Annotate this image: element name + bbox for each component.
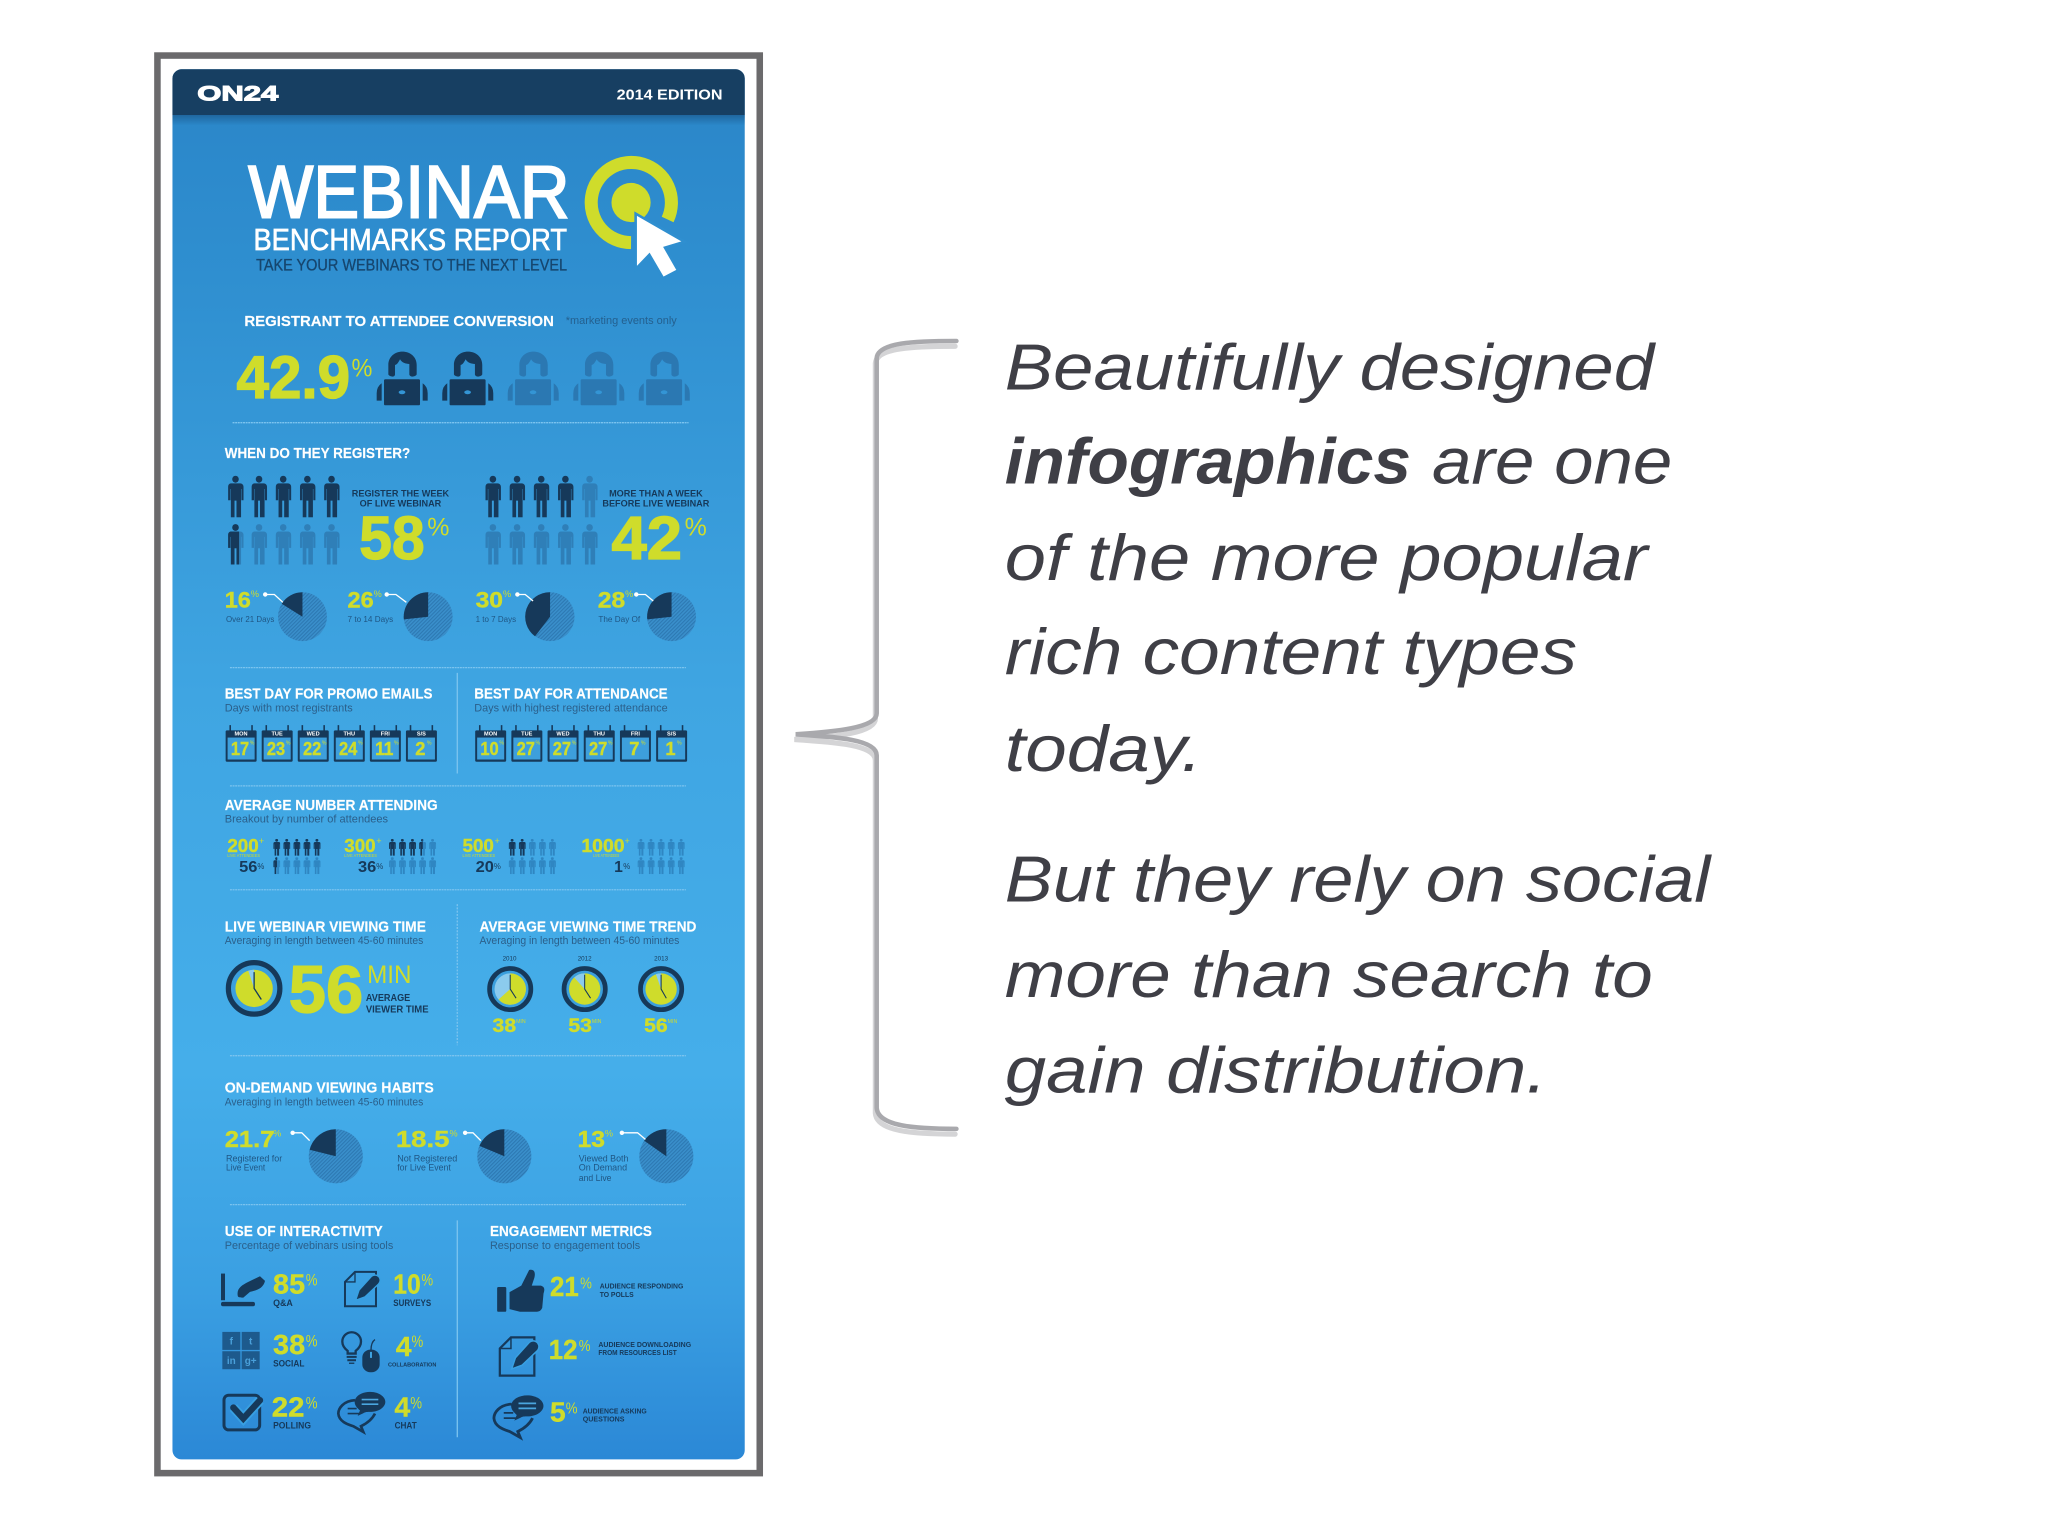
subheading: Averaging in length between 45-60 minutes xyxy=(479,935,680,947)
group: 1000+ attendees xyxy=(581,835,685,876)
stat: Q&A 85%: Q&A xyxy=(273,1298,293,1308)
pie: 7 to 14 days 26%: % xyxy=(374,589,382,599)
pie: not registered 18.5%: Not Registered xyxy=(397,1154,457,1164)
heading: BEST DAY FOR ATTENDANCE xyxy=(474,685,668,702)
group: 500+ attendees xyxy=(463,835,556,876)
calendar row: % xyxy=(358,741,363,747)
clock 2013 56 min: 56 xyxy=(644,1016,668,1037)
icon: document with pen xyxy=(500,1337,539,1376)
stat 42%: 42 xyxy=(611,504,682,573)
calendar row: 22 xyxy=(303,738,321,759)
paragraph 1: are one xyxy=(1432,424,1672,497)
calendar row: 2 xyxy=(415,738,425,759)
pie: 7 to 14 days 26%: 26 xyxy=(348,588,374,613)
stat: social 38%: SOCIAL xyxy=(273,1359,305,1369)
stat: social 38%: 38 xyxy=(273,1329,305,1360)
calendar row: % xyxy=(427,741,432,747)
paragraph 1: rich content types xyxy=(1005,615,1577,688)
pie: viewed both 13%: % xyxy=(605,1129,613,1139)
calendar row: TUE xyxy=(271,732,283,738)
pie: over 21 days 16% xyxy=(225,588,327,641)
section: registrant to attendee conversion xyxy=(236,313,690,411)
clock 2012 53 min: 2012 xyxy=(578,955,592,962)
stat: chat 4% xyxy=(338,1391,422,1432)
calendar row xyxy=(475,725,687,762)
group: 200+ attendees: % xyxy=(257,862,264,871)
caption 58% xyxy=(352,489,450,508)
calendar row: % xyxy=(322,741,327,747)
icon: large clock xyxy=(228,963,280,1014)
icon: social tiles: f xyxy=(230,1337,234,1348)
calendar row: 10 xyxy=(480,738,499,759)
calendar row: WED xyxy=(307,732,320,738)
calendar row xyxy=(226,725,437,762)
subheading: Breakout by number of attendees xyxy=(225,813,389,825)
pie: viewed both 13%: Viewed Both xyxy=(579,1154,628,1164)
group: 1000+ attendees: % xyxy=(623,862,630,871)
calendar row: % xyxy=(250,741,255,747)
group: 1000+ attendees: 1000 xyxy=(581,835,625,856)
pie: 1 to 7 days 30%: 30 xyxy=(476,588,503,613)
clock 2012 53 min: 53 xyxy=(568,1016,592,1037)
section: average viewing time trend xyxy=(479,919,697,1037)
stat 42%: % xyxy=(685,515,707,542)
calendar row: 23 xyxy=(267,738,285,759)
clock 2013 56 min xyxy=(640,955,682,1037)
icon: thumbs up xyxy=(497,1270,544,1312)
stat: surveys 10% xyxy=(345,1268,433,1308)
section: engagement metrics xyxy=(490,1223,692,1438)
stat: surveys 10%: SURVEYS xyxy=(393,1298,431,1308)
stat: downloading from resources 12%: % xyxy=(579,1338,591,1355)
heading: ON-DEMAND VIEWING HABITS xyxy=(225,1079,434,1096)
icon: social tiles: in xyxy=(227,1356,236,1367)
pie: viewed both 13% xyxy=(577,1126,693,1183)
calendar row: 24 xyxy=(339,738,358,759)
calendar row: 27 xyxy=(589,738,607,759)
pie: 7 to 14 days 26%: 7 to 14 Days xyxy=(348,615,393,624)
pie: 1 to 7 days 30% xyxy=(476,588,574,641)
calendar row: 11 xyxy=(375,738,393,759)
pie: the day of 28%: % xyxy=(625,589,633,599)
pie: the day of 28% xyxy=(598,588,696,641)
pie: 1 to 7 days 30%: % xyxy=(503,589,511,599)
icon: chat bubbles xyxy=(338,1392,385,1432)
paragraph 1: Beautifully designed xyxy=(1005,330,1657,403)
section: best day for promo emails xyxy=(225,685,437,762)
group: 500+ attendees: 20 xyxy=(476,859,494,876)
calendar row: 1 xyxy=(665,738,676,759)
stat 58%: % xyxy=(427,515,449,542)
calendar row: TUE xyxy=(521,732,533,738)
section: when do they register xyxy=(225,445,710,641)
people grid 42% xyxy=(486,476,598,564)
infographic frame xyxy=(157,56,760,1473)
group: 1000+ attendees: 1 xyxy=(614,859,623,876)
pie: 7 to 14 days 26% xyxy=(348,588,453,641)
pie: the day of 28%: 28 xyxy=(598,588,625,613)
subheading: Averaging in length between 45-60 minutes xyxy=(225,935,424,947)
calendar row: 27 xyxy=(517,738,535,759)
stat 56: 56 xyxy=(289,954,363,1028)
stat: polling 22%: % xyxy=(306,1393,317,1412)
stat: responding to polls 21%: AUDIENCE RESPONDING xyxy=(600,1282,684,1290)
caption 42%: MORE THAN A WEEK xyxy=(609,489,703,499)
caption 58%: REGISTER THE WEEK xyxy=(352,489,450,499)
heading: ENGAGEMENT METRICS xyxy=(490,1223,652,1240)
stat: collaboration 4%: % xyxy=(412,1332,423,1351)
stat: asking questions 5%: QUESTIONS xyxy=(583,1416,625,1424)
calendar row: % xyxy=(572,741,577,747)
group: 300+ attendees xyxy=(344,838,436,874)
calendar row: % xyxy=(394,741,399,747)
caption 42% xyxy=(602,489,710,508)
stat: asking questions 5%: 5 xyxy=(550,1397,566,1428)
calendar row: 7 xyxy=(629,738,639,759)
section: use of interactivity xyxy=(221,1223,436,1432)
group: 500+ attendees: 500 xyxy=(463,835,494,856)
calendar row: % xyxy=(536,741,541,747)
group: 200+ attendees: 200 xyxy=(227,835,259,856)
icon: target with cursor xyxy=(591,162,685,278)
pie: 1 to 7 days 30%: 1 to 7 Days xyxy=(476,615,516,624)
heading: LIVE WEBINAR VIEWING TIME xyxy=(225,919,426,936)
group: 1000+ attendees: LIVE ATTENDEES xyxy=(593,853,619,858)
group: 500+ attendees: % xyxy=(494,862,501,871)
stat 42.9%: 42.9 xyxy=(236,344,350,411)
text block: commentary xyxy=(1005,330,1712,1106)
stat: chat 4%: CHAT xyxy=(395,1421,417,1431)
pie: over 21 days 16%: 16 xyxy=(225,588,251,613)
stat: asking questions 5%: % xyxy=(566,1401,578,1418)
calendar row: MON xyxy=(235,732,248,738)
clock 2010 38 min: MIN xyxy=(516,1019,526,1025)
pie: the day of 28%: The Day Of xyxy=(598,615,641,624)
pie: registered for live event 21.7%: Live Event xyxy=(226,1163,266,1173)
paragraph 2: But they rely on social xyxy=(1005,843,1712,916)
calendar row: FRI xyxy=(631,732,640,738)
pie: over 21 days 16%: % xyxy=(251,589,259,599)
caption 42%: BEFORE LIVE WEBINAR xyxy=(602,498,710,508)
calendar row: THU xyxy=(343,732,355,738)
caption 58%: OF LIVE WEBINAR xyxy=(360,498,442,508)
pie: registered for live event 21.7%: Registered for xyxy=(226,1154,282,1164)
stat: responding to polls 21%: TO POLLS xyxy=(600,1291,634,1299)
pie: registered for live event 21.7%: 21.7 xyxy=(225,1126,274,1152)
heading: REGISTRANT TO ATTENDEE CONVERSION xyxy=(244,313,554,330)
pie: not registered 18.5%: 18.5 xyxy=(396,1126,449,1152)
clock 2013 56 min: 2013 xyxy=(654,955,669,962)
stat: downloading from resources 12%: AUDIENCE DOWNLOADING xyxy=(598,1341,692,1349)
stat: Q&A 85% xyxy=(221,1268,317,1308)
stat: responding to polls 21%: 21 xyxy=(550,1271,579,1302)
title block xyxy=(248,151,570,274)
calendar row: FRI xyxy=(381,732,390,738)
heading: USE OF INTERACTIVITY xyxy=(225,1223,383,1240)
section: live webinar viewing time xyxy=(225,919,429,1028)
stat: chat 4%: 4 xyxy=(395,1391,411,1422)
percent sign: % xyxy=(351,355,372,382)
stat: chat 4%: % xyxy=(410,1393,422,1412)
stat: polling 22%: POLLING xyxy=(273,1421,311,1431)
heading: WHEN DO THEY REGISTER? xyxy=(225,445,410,462)
unit MIN: MIN xyxy=(367,962,412,989)
paragraph 2: gain distribution. xyxy=(1005,1033,1547,1106)
group: 500+ attendees: LIVE ATTENDEES xyxy=(463,853,495,858)
icon: checkbox xyxy=(224,1395,260,1430)
subheading: Response to engagement tools xyxy=(490,1240,641,1252)
stat: downloading from resources 12% xyxy=(500,1334,692,1376)
footnote: *marketing events only xyxy=(566,315,677,327)
stat: asking questions 5% xyxy=(494,1395,647,1438)
calendar row: MON xyxy=(484,732,497,738)
calendar row: S/S xyxy=(417,732,426,738)
stat: Q&A 85%: 85 xyxy=(273,1268,305,1299)
pie: registered for live event 21.7% xyxy=(225,1126,363,1183)
edition label: 2014 EDITION xyxy=(617,87,723,103)
clock 2010 38 min xyxy=(490,955,531,1037)
calendar row: % xyxy=(641,741,646,747)
subheading: Days with most registrants xyxy=(225,702,353,714)
stat: collaboration 4% xyxy=(342,1331,436,1372)
heading: BEST DAY FOR PROMO EMAILS xyxy=(225,685,432,702)
stat: downloading from resources 12%: 12 xyxy=(549,1334,577,1365)
stat: surveys 10%: % xyxy=(421,1271,433,1290)
calendar row: % xyxy=(286,741,291,747)
stat: asking questions 5%: AUDIENCE ASKING xyxy=(583,1408,647,1416)
stat: social 38%: % xyxy=(306,1331,317,1350)
icon: question chat bubbles xyxy=(494,1395,543,1438)
stat: collaboration 4%: 4 xyxy=(396,1331,412,1362)
group: 300+ attendees: 36 xyxy=(358,859,377,876)
pie: viewed both 13%: 13 xyxy=(577,1126,605,1152)
clock 2012 53 min xyxy=(564,955,605,1037)
subheading: Days with highest registered attendance xyxy=(474,702,668,714)
icon: survey document xyxy=(345,1272,380,1306)
stat: polling 22% xyxy=(224,1391,317,1431)
stat: downloading from resources 12%: FROM RESOURCES LIST xyxy=(598,1349,677,1357)
calendar row: THU xyxy=(593,732,605,738)
calendar row: 17 xyxy=(231,738,249,759)
subtitle: BENCHMARKS REPORT xyxy=(253,222,567,257)
main title: WEBINAR xyxy=(248,151,570,234)
calendar row: S/S xyxy=(667,732,676,738)
pie: over 21 days 16%: Over 21 Days xyxy=(226,615,274,624)
group: 300+ attendees: 300 xyxy=(344,835,376,856)
stat: responding to polls 21%: % xyxy=(580,1275,592,1292)
group: 300+ attendees: + xyxy=(376,836,382,846)
calendar row: % xyxy=(677,741,682,747)
icon: social tiles: t xyxy=(249,1337,253,1348)
clock 2010 38 min: 38 xyxy=(493,1016,516,1037)
calendar row: WED xyxy=(556,732,570,738)
ON24 logo: ON24 xyxy=(197,83,279,106)
icon: social tiles xyxy=(222,1332,260,1369)
caption average viewer time: AVERAGE xyxy=(366,993,411,1004)
paragraph 1: today. xyxy=(1005,712,1202,785)
section: average number attending xyxy=(225,797,685,876)
stat: responding to polls 21% xyxy=(497,1270,684,1312)
group: 200+ attendees: + xyxy=(259,836,264,846)
pie: viewed both 13%: On Demand xyxy=(579,1163,627,1173)
group: 500+ attendees: + xyxy=(495,836,500,846)
clock 2010 38 min: 2010 xyxy=(503,955,517,962)
panel: blue infographic background xyxy=(172,69,745,1459)
stat: surveys 10%: 10 xyxy=(393,1268,421,1299)
pie: registered for live event 21.7%: % xyxy=(273,1129,281,1139)
paragraph 1: infographics xyxy=(1005,424,1411,497)
people grid 58% xyxy=(228,476,340,564)
group: 200+ attendees: LIVE ATTENDEES xyxy=(227,853,260,858)
caption average viewer time xyxy=(366,993,429,1016)
stat 58%: 58 xyxy=(359,504,425,573)
pie: not registered 18.5% xyxy=(396,1126,531,1183)
subheading: Percentage of webinars using tools xyxy=(225,1240,394,1252)
icons: five women at laptops xyxy=(377,352,690,405)
pie: not registered 18.5%: % xyxy=(449,1129,458,1139)
heading: AVERAGE VIEWING TIME TREND xyxy=(479,919,697,936)
group: 200+ attendees: 56 xyxy=(239,859,258,876)
bracket xyxy=(794,341,956,1134)
group: 300+ attendees: LIVE ATTENDEES xyxy=(344,853,377,858)
caption average viewer time: VIEWER TIME xyxy=(366,1005,429,1016)
stat: collaboration 4%: COLLABORATION xyxy=(388,1363,436,1369)
paragraph 1: of the more popular xyxy=(1005,521,1650,594)
calendar row: 27 xyxy=(553,738,571,759)
tagline: TAKE YOUR WEBINARS TO THE NEXT LEVEL xyxy=(256,256,567,274)
stat: Q&A 85%: % xyxy=(306,1271,317,1290)
calendar row: % xyxy=(499,741,504,747)
group: 200+ attendees xyxy=(228,838,320,874)
pie: viewed both 13%: and Live xyxy=(579,1173,611,1183)
clock 2012 53 min: MIN xyxy=(592,1019,602,1025)
calendar row: % xyxy=(608,741,613,747)
paragraph 1 xyxy=(1005,330,1672,785)
stat: polling 22%: 22 xyxy=(272,1391,304,1422)
icon: bulb and mouse xyxy=(342,1332,380,1372)
section: best day for attendance xyxy=(474,685,687,762)
icon: social tiles: g+ xyxy=(245,1356,257,1367)
group: 1000+ attendees: + xyxy=(625,836,630,846)
heading: AVERAGE NUMBER ATTENDING xyxy=(225,797,438,814)
icon: hand on laptop xyxy=(221,1274,265,1306)
paragraph 2: more than search to xyxy=(1005,938,1653,1011)
clock 2013 56 min: MIN xyxy=(668,1019,677,1025)
pie: not registered 18.5%: for Live Event xyxy=(397,1163,451,1173)
header band xyxy=(172,69,745,125)
section: on-demand viewing habits xyxy=(225,1079,693,1183)
group: 300+ attendees: % xyxy=(376,862,383,871)
paragraph 2 xyxy=(1005,843,1712,1106)
subheading: Averaging in length between 45-60 minutes xyxy=(225,1096,424,1108)
stat: social 38% xyxy=(222,1329,317,1369)
